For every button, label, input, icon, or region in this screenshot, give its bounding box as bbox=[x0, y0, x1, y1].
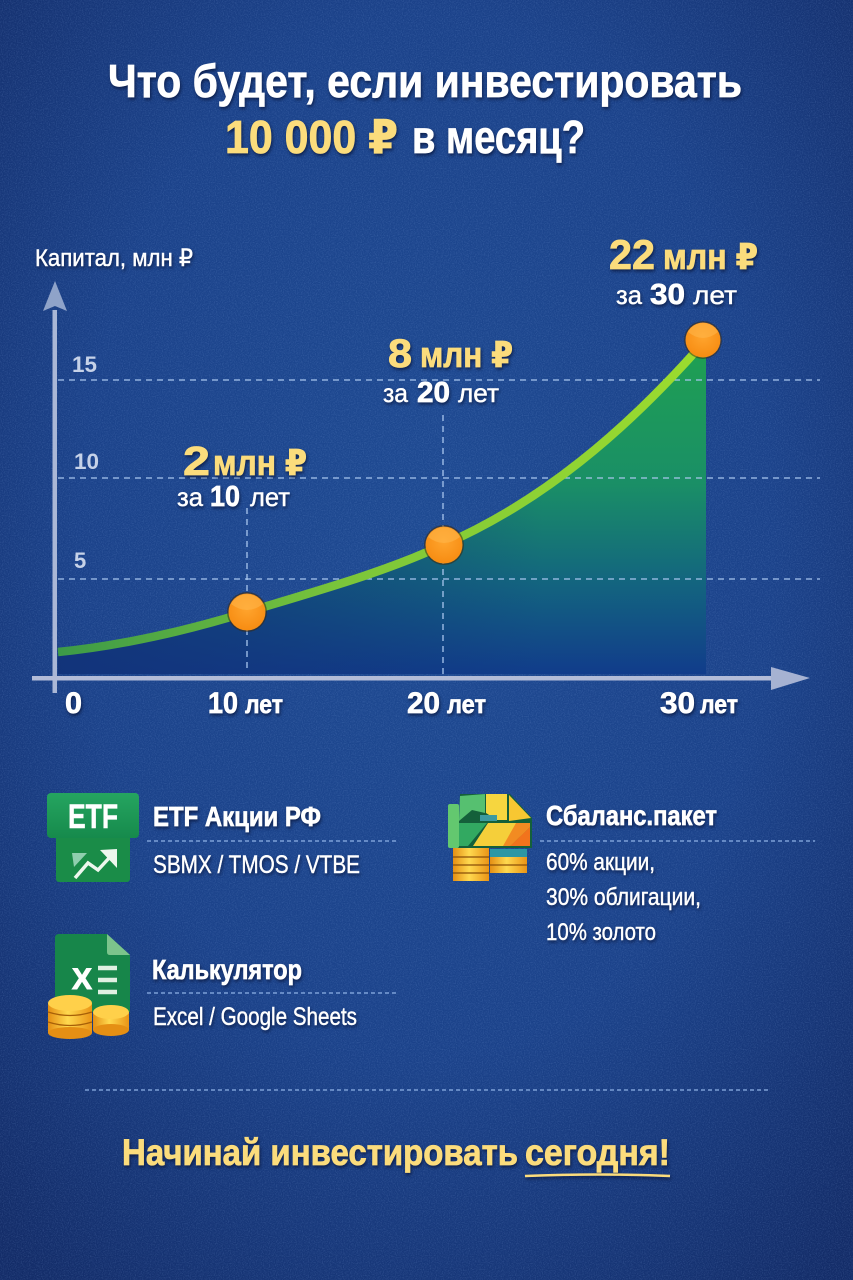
y axis title: Капитал, млн ₽ bbox=[35, 245, 193, 272]
data point: 20 years bbox=[424, 525, 464, 565]
title: 10 000 ₽ bbox=[225, 111, 398, 163]
callout: 8 млн за 20 лет: 20 bbox=[417, 377, 450, 409]
allocation bbox=[546, 849, 701, 946]
y axis ticks: 10 bbox=[74, 449, 99, 474]
x axis labels: лет bbox=[245, 689, 283, 719]
heading: Калькулятор bbox=[152, 954, 302, 985]
chart: capital growth bbox=[32, 231, 820, 720]
x axis bbox=[32, 667, 810, 690]
x axis labels: 20 bbox=[407, 687, 440, 720]
x axis labels: лет bbox=[447, 689, 486, 719]
callout: 22 млн за 30 лет: за bbox=[616, 280, 643, 310]
icon: spreadsheet with coins bbox=[48, 934, 130, 1039]
title: Что будет, если инвестировать bbox=[108, 55, 742, 107]
chart area fill bbox=[58, 345, 706, 674]
tickers: SBMX / TMOS / VTBE bbox=[153, 851, 360, 879]
x axis labels: 10 bbox=[208, 687, 238, 720]
icon: ETF chart: ETF bbox=[68, 798, 118, 836]
data point: 30 years bbox=[684, 321, 722, 359]
y axis ticks: 5 bbox=[74, 548, 86, 573]
y axis bbox=[43, 281, 67, 693]
y axis ticks bbox=[72, 352, 99, 573]
underline bbox=[525, 1174, 670, 1176]
callout: 22 млн за 30 лет: лет bbox=[693, 280, 737, 310]
item: ETF bbox=[47, 793, 397, 882]
callout: 2 млн за 10 лет: млн ₽ bbox=[213, 442, 307, 483]
callout: 22 млн за 30 лет: млн ₽ bbox=[663, 236, 758, 277]
y axis ticks: 15 bbox=[72, 352, 97, 377]
callout: 8 млн за 20 лет: за bbox=[383, 378, 409, 408]
heading: ETF Акции РФ bbox=[153, 801, 321, 832]
allocation: 30% облигации, bbox=[546, 884, 701, 911]
icon: ETF chart bbox=[47, 793, 139, 882]
callout: 8 млн за 20 лет bbox=[383, 332, 513, 409]
callout: 22 млн за 30 лет bbox=[609, 231, 758, 311]
x axis labels: 0 bbox=[65, 687, 82, 720]
allocation: 60% акции, bbox=[546, 849, 655, 876]
callout: 2 млн за 10 лет: 10 bbox=[210, 481, 240, 513]
x axis labels bbox=[65, 687, 738, 720]
growth curve bbox=[58, 342, 704, 652]
title bbox=[108, 55, 742, 163]
x axis labels: 30 bbox=[660, 687, 695, 720]
x axis labels: лет bbox=[700, 689, 738, 719]
callout: 2 млн за 10 лет: 2 bbox=[183, 438, 210, 484]
call to action: Начинай инвестировать bbox=[122, 1132, 518, 1173]
data point: 10 years bbox=[227, 592, 267, 632]
callout: 8 млн за 20 лет: 8 bbox=[388, 332, 412, 376]
callout: 8 млн за 20 лет: млн ₽ bbox=[420, 334, 513, 375]
grid lines bbox=[58, 380, 820, 674]
title: в месяц? bbox=[412, 111, 585, 163]
allocation: 10% золото bbox=[546, 919, 656, 946]
callout: 22 млн за 30 лет: 30 bbox=[650, 279, 685, 311]
heading: Сбаланс.пакет bbox=[546, 800, 717, 831]
callout: 2 млн за 10 лет: лет bbox=[250, 482, 290, 512]
icon: balanced package bbox=[448, 794, 532, 881]
item: balanced portfolio bbox=[448, 794, 815, 946]
item: calculator bbox=[48, 934, 397, 1039]
callout: 2 млн за 10 лет bbox=[177, 438, 307, 513]
tools: Excel / Google Sheets bbox=[153, 1003, 357, 1031]
icon: spreadsheet with coins: X bbox=[72, 963, 92, 996]
callout: 22 млн за 30 лет: 22 bbox=[609, 231, 655, 278]
callout: 8 млн за 20 лет: лет bbox=[458, 378, 499, 408]
call to action: сегодня! bbox=[525, 1132, 670, 1173]
callout: 2 млн за 10 лет: за bbox=[177, 482, 204, 512]
